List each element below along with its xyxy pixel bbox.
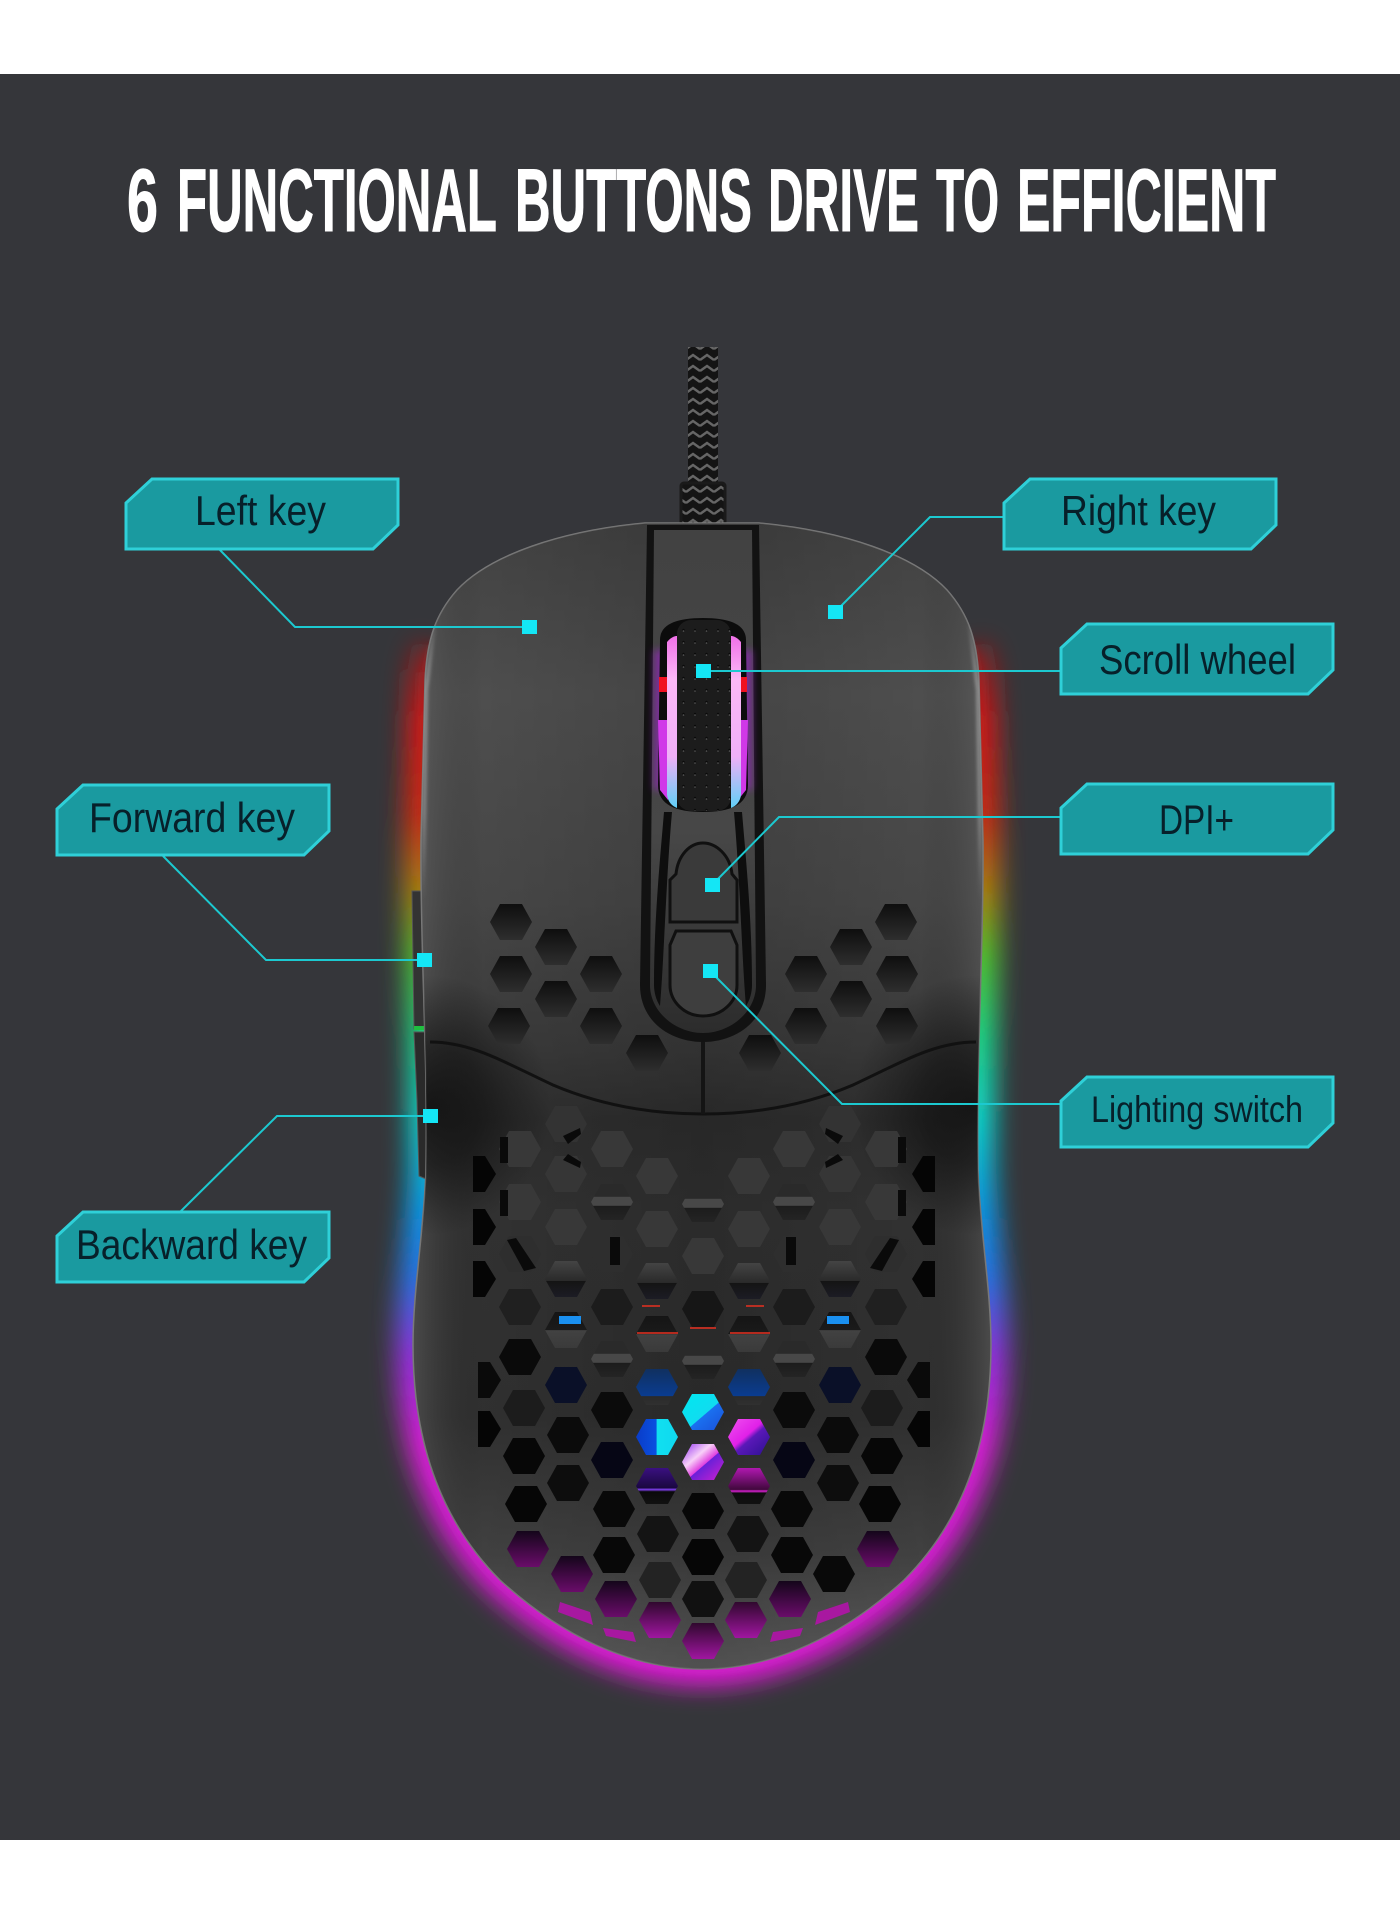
gaming mouse illustration [310, 347, 1094, 1700]
body shading [414, 523, 990, 1669]
callout: Backward key: Backward key [76, 1221, 307, 1268]
mouse side buttons [412, 891, 438, 1182]
callout: Left key: Left key [195, 487, 326, 534]
callout: Lighting switch: Lighting switch [1091, 1089, 1303, 1130]
callout: Right key: Right key [1061, 487, 1216, 534]
callout: DPI+ [705, 784, 1333, 892]
callout: Scroll wheel: Scroll wheel [1099, 636, 1296, 683]
centre seam [701, 1040, 705, 1114]
mouse body [413, 523, 991, 1669]
callout: Left key [126, 479, 537, 634]
lighting switch button [670, 931, 737, 1016]
title: BUTTONS [515, 150, 752, 250]
bottom rim vents and accent chips [558, 1306, 850, 1642]
title: 6 [127, 150, 158, 250]
internal details seen through vents [500, 1128, 906, 1271]
lower honeycomb vents [473, 1106, 935, 1659]
scroll wheel [654, 618, 752, 812]
callout: Backward key [57, 1109, 438, 1282]
title: DRIVE [768, 150, 919, 250]
callout: Lighting switch [703, 964, 1333, 1147]
title: TO [936, 150, 999, 250]
centre channel [640, 525, 766, 1042]
callout: DPI+: DPI+ [1159, 796, 1234, 843]
RGB glow around mouse [413, 645, 991, 1669]
title [127, 150, 1276, 250]
palm seam lines [430, 1042, 976, 1114]
callout: Right key [828, 479, 1276, 619]
callout: Forward key: Forward key [89, 794, 295, 841]
upper honeycomb vents [488, 904, 918, 1071]
title: FUNCTIONAL [177, 150, 497, 250]
cable [681, 347, 725, 527]
callout: Scroll wheel [696, 624, 1333, 694]
DPI+ button [670, 843, 737, 922]
callout: Forward key [57, 785, 432, 967]
